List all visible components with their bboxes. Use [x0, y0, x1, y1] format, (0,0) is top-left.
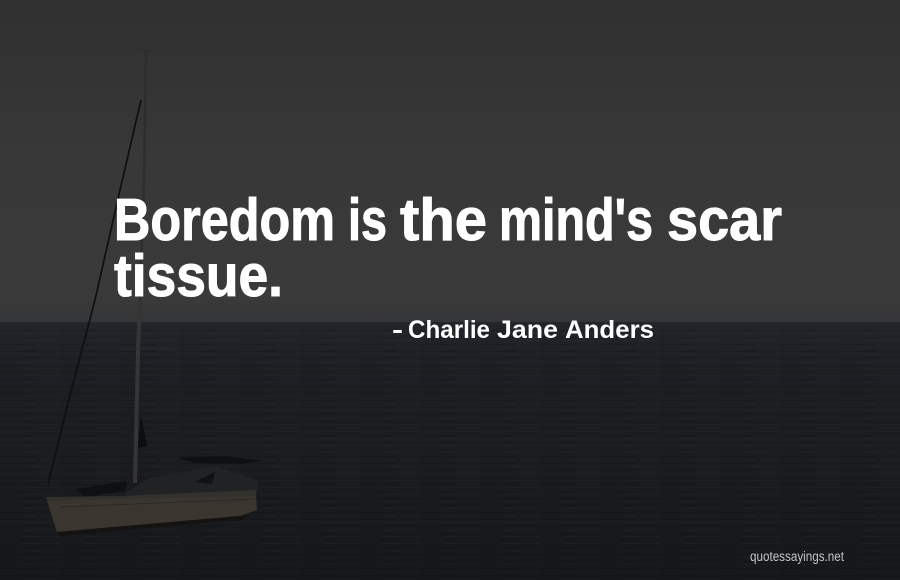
hull	[47, 496, 257, 532]
background: sky	[0, 0, 900, 323]
quote line 1: mind's	[499, 187, 653, 253]
quote line 1	[114, 187, 782, 253]
attribution: -	[392, 316, 403, 344]
quote line 2: tissue.	[114, 243, 283, 309]
cabin	[125, 466, 258, 498]
hull stripe	[60, 499, 255, 507]
attribution: Jane	[497, 316, 558, 344]
quote line 1: the	[400, 187, 487, 253]
quote line 1: Boredom	[114, 187, 335, 253]
rolled sail boom	[76, 481, 127, 497]
quote line 1: is	[348, 187, 387, 253]
attribution: Charlie	[408, 316, 490, 344]
lower mast	[135, 300, 140, 483]
background: sea	[0, 322, 900, 580]
spreader	[120, 348, 175, 350]
watermark: quotessayings.net	[750, 549, 844, 564]
deck	[46, 490, 256, 503]
hull waterline	[57, 515, 250, 536]
upper mast	[140, 52, 146, 300]
quote text	[114, 187, 782, 309]
windshield detail	[195, 472, 215, 484]
quote line 1: scar	[667, 187, 782, 253]
attribution: Anders	[565, 316, 654, 344]
attribution	[392, 316, 654, 344]
sailboat photo element	[46, 51, 264, 536]
mast top fitting	[142, 50, 151, 52]
bimini canopy	[177, 456, 264, 464]
forestay rigging line	[48, 100, 141, 484]
dark sail flag near mast	[138, 416, 147, 448]
